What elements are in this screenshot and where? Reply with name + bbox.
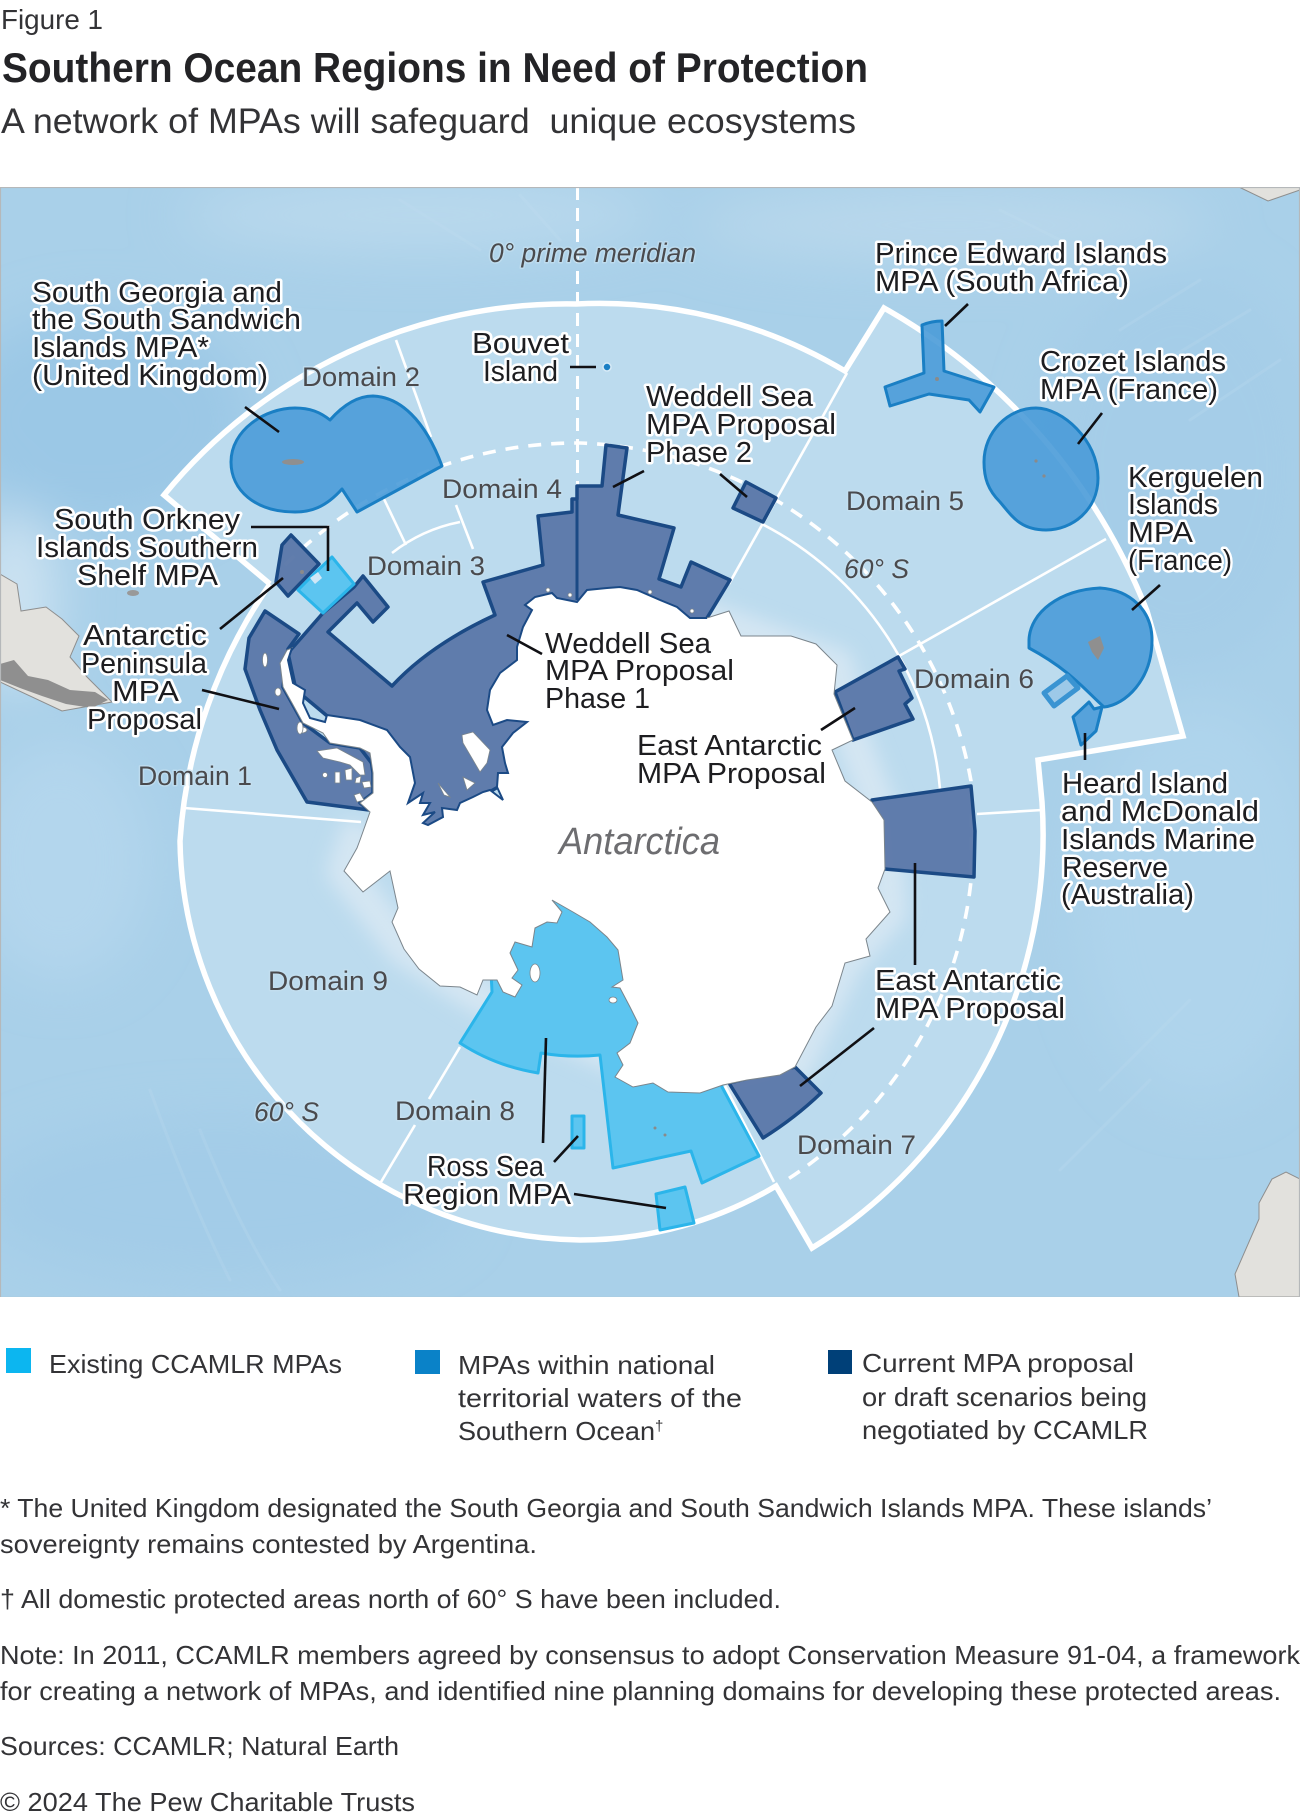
- Antarctica: [280, 587, 890, 1093]
- footnote: asterisk: * The United Kingdom designated the South Georgia and South Sandwich Islands MPA. These islands’: [0, 1493, 1212, 1523]
- sources: Sources: CCAMLR; Natural Earth: [0, 1731, 399, 1761]
- MPA: Heard Island and McDonald Islands: [1073, 702, 1102, 745]
- ocean tonal variation: [1, 188, 1167, 952]
- label: Weddell Sea Phase 2: Weddell Sea: [646, 381, 814, 413]
- domain labels: Domain 1: [138, 761, 252, 791]
- island specks: [300, 377, 1046, 1136]
- label: prime meridian: 0° prime meridian: [489, 238, 696, 268]
- label: Crozet Islands MPA: [1040, 346, 1226, 406]
- Bouvet Island marker: [603, 363, 611, 371]
- subtitle: A network of MPAs will safeguard unique ecosystems: [1, 102, 856, 141]
- label: East Antarctic upper: [637, 730, 826, 790]
- label: Prince Edward Islands MPA: [875, 238, 1167, 298]
- label: Kerguelen Islands MPA: Kerguelen: [1128, 462, 1263, 494]
- Weddell internal phase line: [576, 499, 578, 600]
- legend text: proposal: negotiated by CCAMLR: [862, 1415, 1148, 1445]
- MPA proposal: East Antarctic lower: [729, 1067, 821, 1138]
- domain labels: Domain 7: [797, 1130, 916, 1160]
- ocean background: [0, 187, 1300, 1297]
- label: Bouvet Island: Island: [483, 356, 558, 388]
- domain labels: Domain 3: [367, 551, 485, 581]
- label: Prince Edward Islands MPA: MPA (South Africa): [875, 266, 1129, 298]
- label: Ross Sea Region MPA: Region MPA: [403, 1179, 572, 1211]
- label: Antarctic Peninsula MPA Proposal: MPA: [112, 676, 180, 708]
- MPA existing: Ross Sea Region main: [460, 890, 759, 1183]
- legend swatch: national: [415, 1350, 440, 1374]
- header: [1, 4, 868, 141]
- domain labels: Domain 5: [846, 486, 964, 516]
- ocean streak texture: [150, 195, 1280, 1290]
- South Orkney notch: [310, 572, 322, 584]
- note: [0, 1640, 1300, 1706]
- label: Crozet Islands MPA: Crozet Islands: [1040, 346, 1226, 378]
- ice rises and islands: [262, 588, 694, 1003]
- MPA proposal: East Antarctic middle: [860, 786, 975, 877]
- map panel: [0, 180, 1300, 1298]
- label: Kerguelen Islands MPA: [1128, 462, 1263, 577]
- note: for creating a network of MPAs, and identified nine planning domains for developing these protected areas.: [0, 1676, 1281, 1706]
- CCAMLR area fill: [164, 303, 1183, 1248]
- label: South Georgia MPA: (United Kingdom): [32, 360, 268, 392]
- MPA: Kerguelen fragment: [1044, 676, 1078, 706]
- footnotes: [0, 1493, 1300, 1817]
- label: Weddell Sea Phase 1: Phase 1: [545, 683, 650, 715]
- footnote: asterisk: sovereignty remains contested by Argentina.: [0, 1529, 537, 1559]
- legend text: proposal: or draft scenarios being: [862, 1382, 1147, 1412]
- label: South Georgia MPA: South Georgia and: [32, 277, 282, 309]
- MPA proposal: East Antarctic upper: [835, 657, 913, 740]
- copyright: © 2024 The Pew Charitable Trusts: [0, 1787, 415, 1817]
- MPA existing: Ross Sea small block: [572, 1116, 584, 1148]
- label: Weddell Sea Phase 1: [545, 628, 734, 715]
- legend swatch: existing: [6, 1348, 31, 1373]
- label: East Antarctic lower: East Antarctic: [875, 965, 1061, 997]
- label: East Antarctic lower: [875, 965, 1065, 1025]
- domain labels: Domain 4: [442, 474, 562, 504]
- CCAMLR boundary outline: [164, 303, 1183, 1248]
- label: Heard Island and McDonald Islands: (Australia): [1061, 879, 1194, 911]
- label: South Georgia MPA: Islands MPA*: [32, 332, 209, 364]
- MPA proposal: Weddell Sea Phase 2 small block: [733, 482, 776, 522]
- label: Antarctic Peninsula MPA Proposal: Proposal: [87, 704, 202, 736]
- legend text: national: MPAs within national: [458, 1350, 715, 1380]
- legend text: national: territorial waters of the: [458, 1383, 742, 1413]
- label: Weddell Sea Phase 2: Phase 2: [646, 437, 752, 469]
- planning domain dividers: [184, 340, 1106, 1182]
- label: South Orkney MPA: Shelf MPA: [77, 560, 219, 592]
- label: Antarctic Peninsula MPA Proposal: [81, 620, 208, 736]
- legend text: proposal: [862, 1348, 1148, 1445]
- label: Bouvet Island: [472, 328, 569, 388]
- label: Bouvet Island: Bouvet: [472, 328, 569, 360]
- figure number: Figure 1: [1, 4, 103, 35]
- Kerguelen island: [1088, 636, 1104, 660]
- label: Crozet Islands MPA: MPA (France): [1040, 374, 1218, 406]
- label: Antarctica: Antarctica: [557, 821, 720, 863]
- domain labels: Domain 8: [395, 1096, 515, 1126]
- land: Africa tip: [1239, 187, 1300, 201]
- MPA existing: South Orkney Islands Southern Shelf: [298, 557, 354, 613]
- label: Heard Island and McDonald Islands: Islands Marine: [1061, 824, 1255, 856]
- MPA: Crozet Islands: [984, 408, 1098, 530]
- South Georgia island: [282, 459, 304, 465]
- land: Falkland Islands: [127, 590, 139, 596]
- domain labels: Domain 9: [268, 966, 388, 996]
- legend text: existing: Existing CCAMLR MPAs: [49, 1349, 342, 1379]
- domain labels: Domain 6: [914, 664, 1034, 694]
- continental shelf glow: [344, 602, 890, 1093]
- domain labels: [138, 362, 1034, 1160]
- footnote: asterisk: [0, 1493, 1212, 1559]
- MPA: South Georgia and the South Sandwich Islands: [231, 396, 442, 512]
- MPA: Prince Edward Islands: [885, 321, 994, 412]
- MPA proposal: Antarctic Peninsula: [245, 611, 373, 810]
- label: Heard Island and McDonald Islands: [1061, 768, 1259, 911]
- 60 degrees south dashed line: [285, 443, 971, 1181]
- label: 60 S north: 60° S: [844, 554, 909, 584]
- land: South America: [0, 574, 112, 711]
- label: Kerguelen Islands MPA: MPA: [1128, 517, 1194, 549]
- label: East Antarctic upper: MPA Proposal: [637, 758, 826, 790]
- label: East Antarctic lower: MPA Proposal: [875, 993, 1065, 1025]
- label: Antarctic Peninsula MPA Proposal: Antarctic: [83, 620, 207, 652]
- leader lines: [202, 304, 1160, 1208]
- label: Ross Sea Region MPA: Ross Sea: [427, 1151, 545, 1183]
- land: Patagonian archipelago: [0, 660, 108, 708]
- legend text: national: †: [655, 1418, 663, 1435]
- legend text: national: [458, 1350, 742, 1446]
- label: South Georgia MPA: the South Sandwich: [32, 304, 301, 336]
- MPA proposal: Weddell Sea Phase 1 and 2: [288, 445, 730, 830]
- label: Weddell Sea Phase 1: Weddell Sea: [545, 628, 712, 660]
- note: Note: In 2011, CCAMLR members agreed by consensus to adopt Conservation Measure 91-04, a framework: [0, 1640, 1300, 1670]
- legend: [6, 1348, 1148, 1446]
- MPA: Kerguelen Islands: [1029, 588, 1152, 707]
- footnote: dagger: † All domestic protected areas north of 60° S have been included.: [0, 1584, 781, 1614]
- label: South Orkney MPA: [36, 504, 258, 592]
- label: Prince Edward Islands MPA: Prince Edward Islands: [875, 238, 1167, 270]
- label: Kerguelen Islands MPA: Islands: [1128, 489, 1218, 521]
- land: Australia / New Zealand: [1235, 1172, 1300, 1297]
- label: Heard Island and McDonald Islands: and McDonald: [1061, 796, 1259, 828]
- label: Antarctic Peninsula MPA Proposal: Peninsula: [81, 648, 208, 680]
- label: Kerguelen Islands MPA: (France): [1128, 545, 1232, 577]
- label: Heard Island and McDonald Islands: Reserve: [1062, 852, 1168, 884]
- MPA proposal: Antarctic Peninsula north: [276, 535, 319, 596]
- label: South Georgia MPA: [32, 277, 301, 392]
- title: Southern Ocean Regions in Need of Protection: [2, 44, 868, 91]
- label: Ross Sea Region MPA: [403, 1151, 572, 1211]
- label: South Orkney MPA: Islands Southern: [36, 532, 258, 564]
- legend text: national: Southern Ocean: [458, 1416, 655, 1446]
- label: Weddell Sea Phase 1: MPA Proposal: [545, 655, 734, 687]
- map border: [0, 188, 1300, 1298]
- label: 60 S south: 60° S: [254, 1097, 319, 1127]
- label: Heard Island and McDonald Islands: Heard Island: [1062, 768, 1228, 800]
- MPA existing: Ross Sea south block: [656, 1187, 694, 1230]
- domain labels: Domain 2: [302, 362, 420, 392]
- label: Weddell Sea Phase 2: MPA Proposal: [646, 409, 836, 441]
- legend swatch: proposal: [828, 1350, 852, 1374]
- Weddell coast outline: [288, 587, 707, 825]
- prime meridian: [576, 187, 579, 487]
- label: South Orkney MPA: South Orkney: [54, 504, 241, 536]
- label: Weddell Sea Phase 2: [646, 381, 836, 469]
- legend text: proposal: Current MPA proposal: [862, 1348, 1134, 1378]
- label: East Antarctic upper: East Antarctic: [637, 730, 822, 762]
